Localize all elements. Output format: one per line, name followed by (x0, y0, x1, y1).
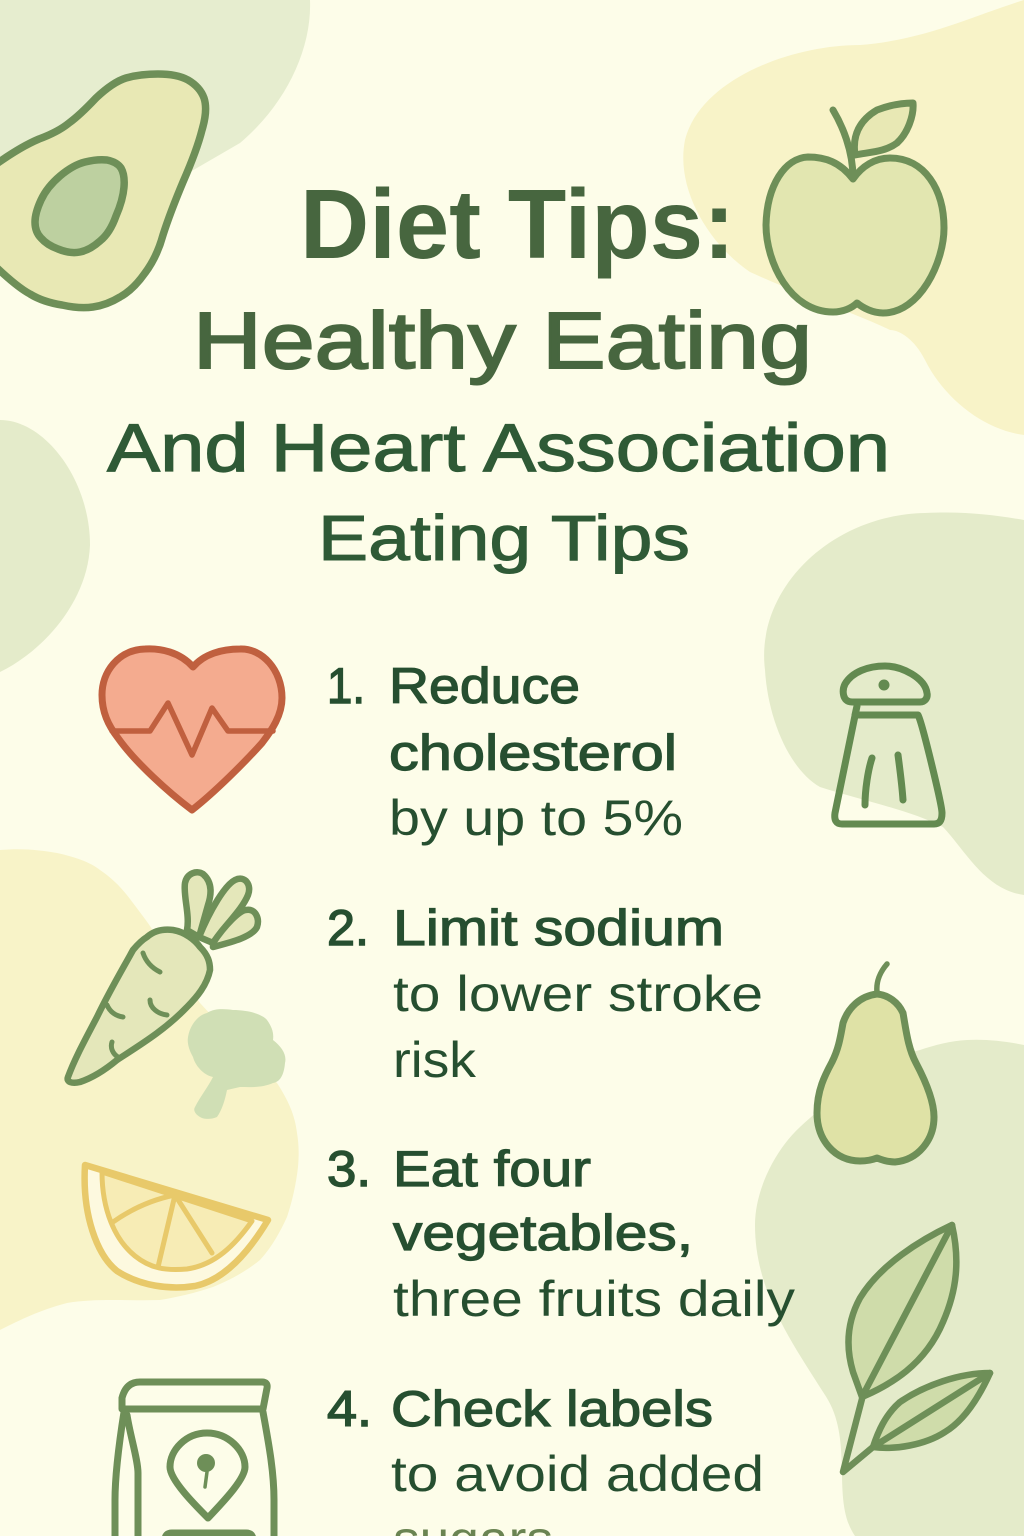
icon: pear (817, 964, 934, 1162)
list item 1: Reduce (389, 658, 580, 714)
list item 1: cholesterol (389, 725, 677, 781)
list item 2: Limit sodium (393, 900, 724, 956)
title (107, 169, 890, 574)
title: Eating Tips (318, 502, 690, 574)
icon: apple (766, 103, 944, 313)
list item 1: 1. (327, 658, 365, 714)
icon: lemon slice (85, 1165, 268, 1287)
list item 4: 4. (327, 1381, 372, 1437)
list item 2: risk (393, 1032, 477, 1088)
list item 4: to avoid added (391, 1446, 764, 1502)
icon: broccoli (188, 1009, 285, 1119)
list item 3 (327, 1141, 795, 1327)
icon: salt shaker (835, 666, 942, 824)
icon: heart with pulse (102, 649, 282, 810)
list item 3: 3. (327, 1141, 371, 1197)
title: Healthy Eating (193, 296, 812, 385)
list item 1 (327, 658, 683, 846)
icon: carrot (68, 872, 258, 1083)
list item 3: vegetables, (393, 1205, 693, 1261)
icon: leaves (843, 1225, 990, 1472)
list item 1: by up to 5% (389, 790, 683, 846)
title: Diet Tips: (300, 169, 735, 279)
list item 4 (327, 1381, 764, 1536)
list item 2: 2. (327, 900, 369, 956)
list item 3: Eat four (393, 1141, 591, 1197)
list item 2: to lower stroke (393, 966, 763, 1022)
list item 4: Check labels (391, 1381, 713, 1437)
list item 3: three fruits daily (393, 1271, 795, 1327)
list item 2 (327, 900, 763, 1088)
icon: food package (115, 1382, 274, 1536)
icon: avocado (0, 74, 206, 308)
title: And Heart Association (107, 410, 890, 486)
